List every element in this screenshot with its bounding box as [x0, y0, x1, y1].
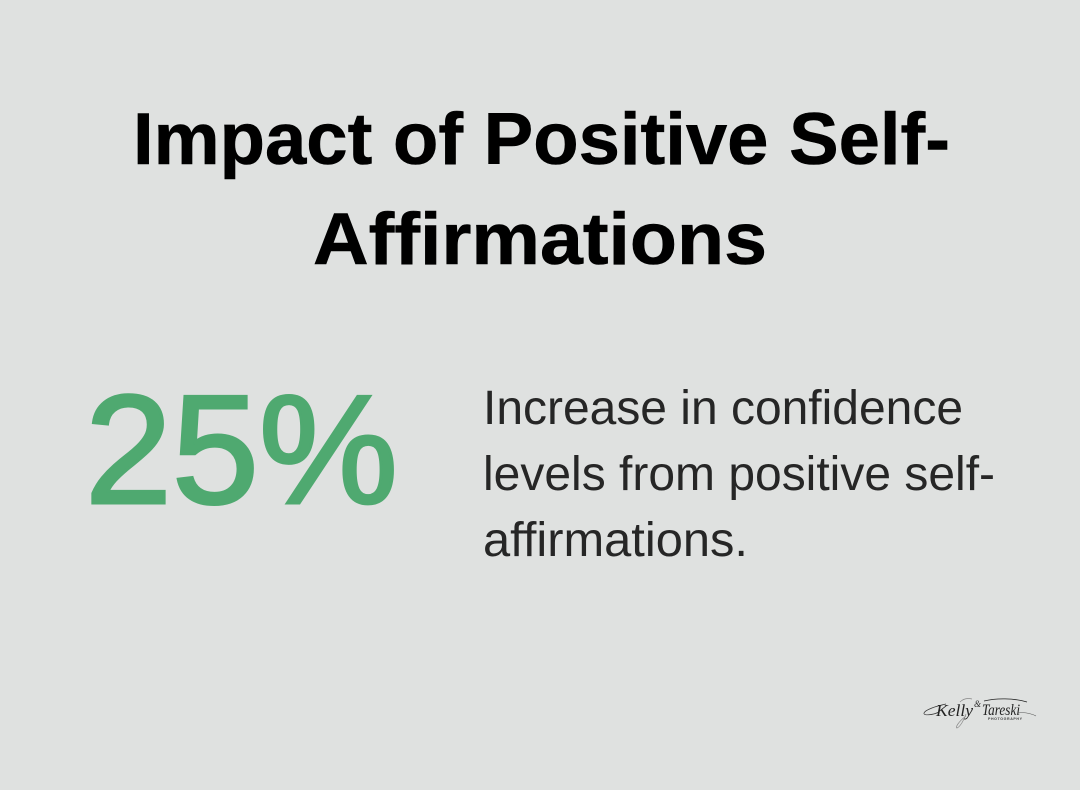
logo: Kelly & Tareski Photography signature — [924, 698, 1036, 728]
statistic: 25%: 25% — [85, 363, 398, 536]
logo: Kelly & Tareski Photography signature: Tareski — [982, 702, 1020, 719]
description text — [483, 382, 995, 567]
title — [133, 99, 950, 280]
logo: Kelly & Tareski Photography signature: & — [974, 699, 981, 709]
title: Impact of Positive Self- — [133, 99, 950, 180]
description text: levels from positive self- — [483, 448, 995, 501]
title: Affirmations — [313, 199, 767, 280]
description text: Increase in confidence — [483, 382, 963, 435]
logo: Kelly & Tareski Photography signature: PHOTOGRAPHY — [988, 717, 1023, 721]
logo: Kelly & Tareski Photography signature: Kelly — [935, 701, 973, 720]
description text: affirmations. — [483, 514, 748, 567]
